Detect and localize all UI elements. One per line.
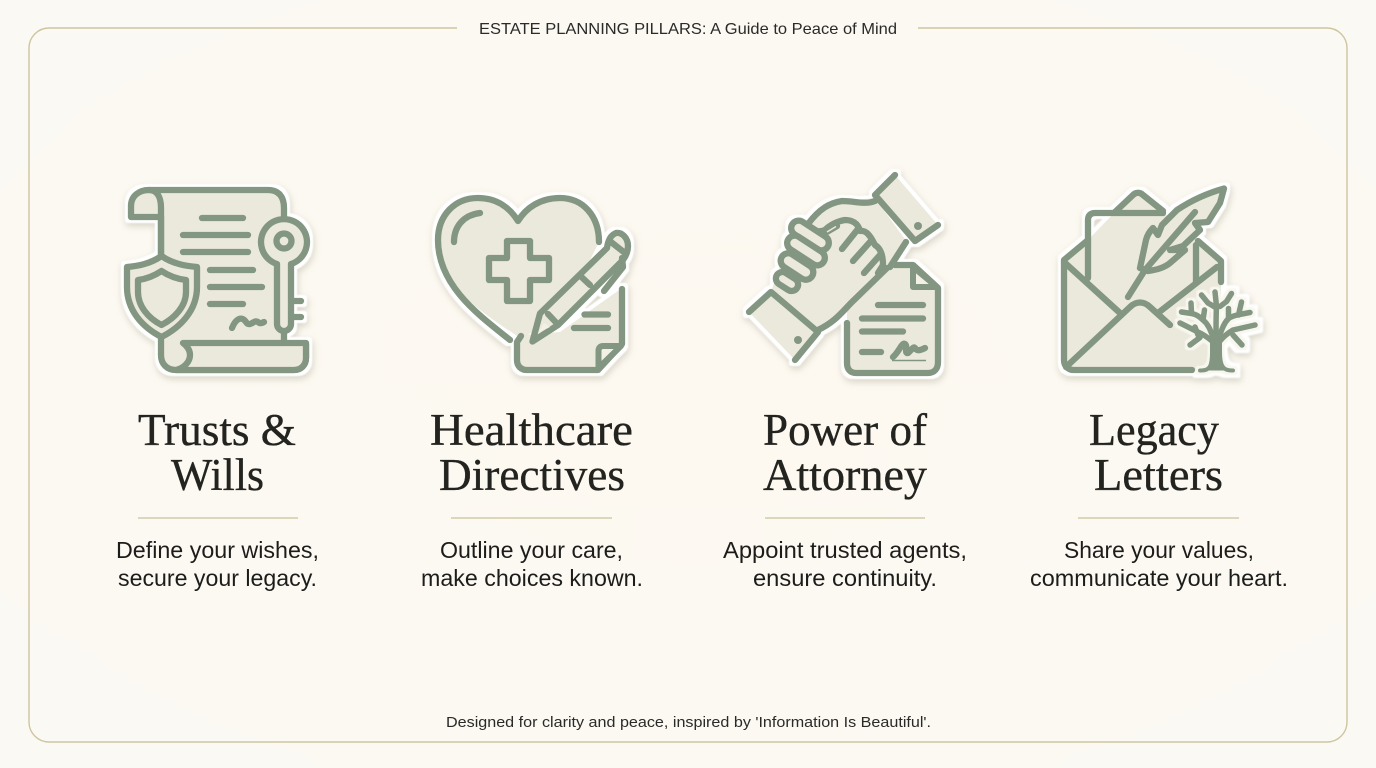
panel: trusts and wills bbox=[116, 190, 319, 591]
heading: power of attorney: Attorney bbox=[763, 450, 928, 500]
heading: power of attorney: Power of bbox=[763, 405, 927, 455]
title: ESTATE PLANNING PILLARS: A Guide to Peace of Mind bbox=[479, 21, 897, 38]
heading: trusts and wills: Trusts & bbox=[138, 405, 296, 455]
icon: scroll with shield and key bbox=[127, 190, 307, 370]
panel: healthcare directives bbox=[421, 198, 643, 591]
description: trusts and wills: Define your wishes, bbox=[116, 537, 319, 563]
heading: legacy letters: Letters bbox=[1094, 450, 1223, 500]
description: healthcare directives: make choices known. bbox=[421, 565, 643, 591]
heading: healthcare directives bbox=[430, 405, 633, 500]
footer note: Designed for clarity and peace, inspired by 'Information Is Beautiful'. bbox=[446, 714, 931, 731]
heading: power of attorney bbox=[763, 405, 928, 500]
description: legacy letters bbox=[1030, 537, 1288, 591]
heading: legacy letters: Legacy bbox=[1089, 405, 1219, 455]
icon: handshake and signed document bbox=[749, 175, 938, 373]
description: healthcare directives: Outline your care, bbox=[440, 537, 623, 563]
panel: legacy letters bbox=[1030, 188, 1288, 591]
description: trusts and wills bbox=[116, 537, 319, 591]
description: trusts and wills: secure your legacy. bbox=[118, 565, 317, 591]
panel: power of attorney bbox=[723, 175, 967, 591]
heading: healthcare directives: Healthcare bbox=[430, 405, 633, 455]
icon: envelope with quill and tree bbox=[1064, 188, 1255, 371]
heading: healthcare directives: Directives bbox=[439, 450, 625, 500]
heading: trusts and wills bbox=[138, 405, 296, 500]
description: legacy letters: communicate your heart. bbox=[1030, 565, 1288, 591]
heading: trusts and wills: Wills bbox=[171, 450, 264, 500]
description: healthcare directives bbox=[421, 537, 643, 591]
description: power of attorney bbox=[723, 537, 967, 591]
description: power of attorney: Appoint trusted agents, bbox=[723, 537, 967, 563]
description: power of attorney: ensure continuity. bbox=[753, 565, 937, 591]
description: legacy letters: Share your values, bbox=[1064, 537, 1254, 563]
icon: heart with pen and note bbox=[438, 198, 628, 370]
heading: legacy letters bbox=[1089, 405, 1223, 500]
